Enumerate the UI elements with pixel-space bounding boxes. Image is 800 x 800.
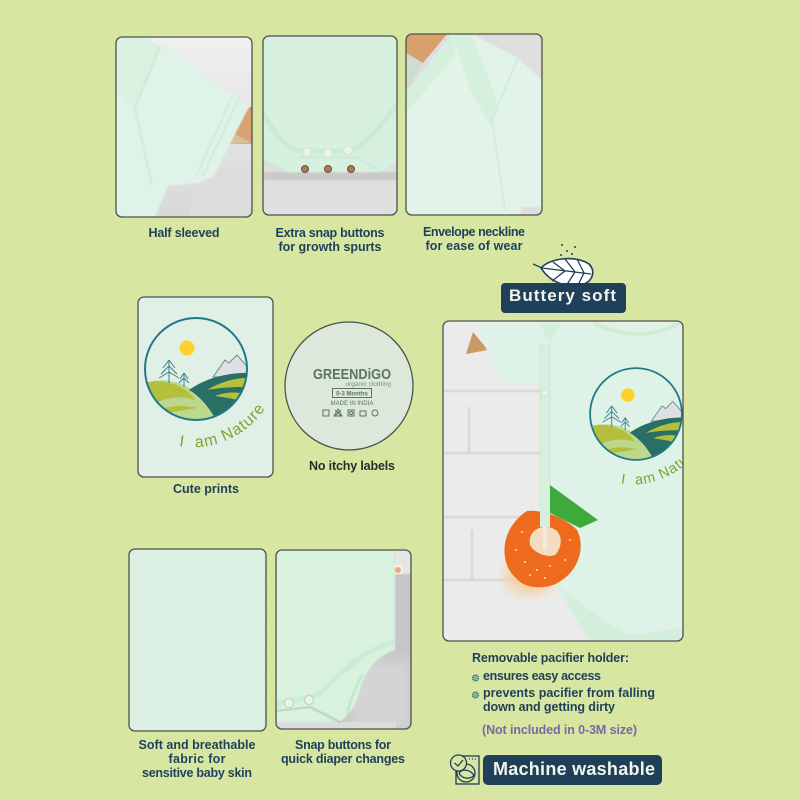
text: removable pacifier holder details: (Not included in 0-3M size) bbox=[482, 723, 637, 737]
panel: tagless label circle: GREENDiGO bbox=[313, 367, 391, 383]
caption: soft breathable fabric: Soft and breathable bbox=[138, 738, 256, 752]
caption: half sleeved: Half sleeved bbox=[148, 226, 220, 240]
panel: fabric texture photo bbox=[129, 549, 266, 731]
graphic: print on bodysuit: I am Nature bbox=[622, 456, 682, 484]
caption: soft breathable fabric bbox=[138, 738, 256, 780]
caption: no itchy labels: No itchy labels bbox=[309, 459, 395, 473]
caption: extra snap buttons: for growth spurts bbox=[278, 240, 382, 254]
caption: envelope neckline: Envelope neckline bbox=[423, 225, 525, 239]
panel: tagless label circle: MADE IN INDIA bbox=[331, 401, 373, 407]
text: removable pacifier holder details: ensures easy access bbox=[483, 669, 601, 683]
graphic: print on bodysuit bbox=[589, 367, 682, 484]
caption: soft breathable fabric: fabric for bbox=[168, 752, 226, 766]
caption: extra snap buttons: Extra snap buttons bbox=[276, 226, 385, 240]
text: removable pacifier holder details: prevents pacifier from falling bbox=[483, 686, 655, 700]
badge: machine washable: Machine washable bbox=[493, 759, 655, 779]
graphic: I am Nature print bbox=[144, 317, 264, 448]
caption: snap buttons diaper changes: Snap buttons for bbox=[295, 738, 391, 752]
panel: extra snap buttons photo bbox=[263, 36, 397, 215]
icon: green teether leaf bbox=[550, 485, 598, 528]
text: removable pacifier holder details bbox=[472, 651, 655, 737]
icon: washing machine bbox=[450, 755, 479, 784]
graphic: I am Nature print: I am Nature bbox=[180, 406, 264, 448]
badge: buttery soft: Buttery soft bbox=[509, 286, 616, 305]
caption: envelope neckline: for ease of wear bbox=[426, 239, 523, 253]
panel: tagless label circle: organic clothing bbox=[345, 381, 391, 388]
caption: cute prints: Cute prints bbox=[173, 482, 239, 496]
caption: snap buttons diaper changes: quick diaper changes bbox=[281, 752, 405, 766]
text: removable pacifier holder details: Removable pacifier holder: bbox=[472, 651, 629, 665]
caption: snap buttons diaper changes bbox=[281, 738, 405, 766]
panel: tagless label circle: 0-3 Months bbox=[336, 392, 368, 398]
badge: buttery soft bbox=[501, 283, 626, 313]
panel: half sleeved photo bbox=[116, 37, 252, 217]
text: removable pacifier holder details: down and getting dirty bbox=[483, 700, 615, 714]
badge: machine washable bbox=[483, 755, 662, 785]
panel: pacifier holder photo bbox=[442, 320, 684, 642]
caption: extra snap buttons bbox=[276, 226, 385, 254]
caption: envelope neckline bbox=[423, 225, 525, 253]
panel: tagless label circle bbox=[285, 322, 413, 450]
panel: envelope neckline photo bbox=[406, 34, 542, 215]
panel: cute prints photo bbox=[137, 296, 274, 478]
panel: diaper snap buttons photo bbox=[276, 550, 411, 729]
icon: feather with dots bbox=[533, 244, 593, 286]
caption: soft breathable fabric: sensitive baby skin bbox=[142, 766, 252, 780]
icon: orange fruit teether bbox=[504, 505, 581, 587]
